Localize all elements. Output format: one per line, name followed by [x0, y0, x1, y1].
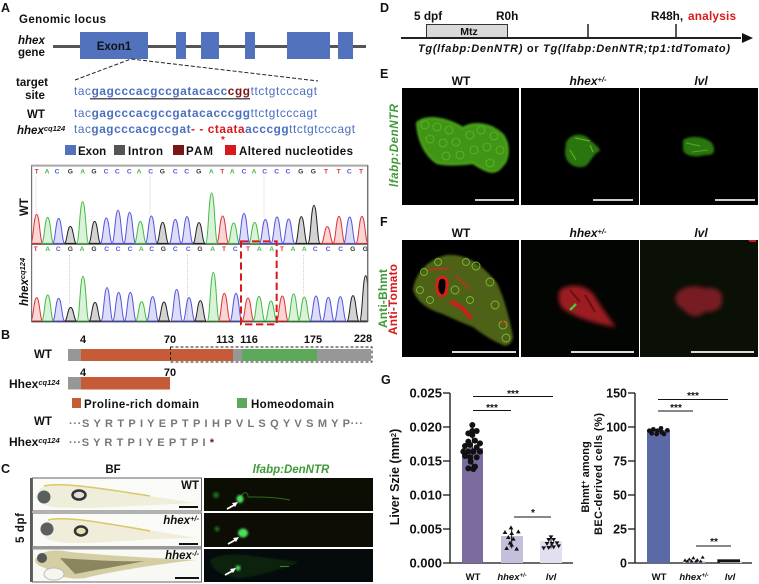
panel A: genomic locus	[1, 1, 372, 324]
data points	[460, 422, 561, 551]
x labels	[652, 572, 736, 583]
column headings	[452, 226, 708, 240]
sequence legend: Altered nucleotides	[239, 146, 353, 158]
image: WT liver	[402, 88, 519, 205]
side labels: Anti-Tomato	[386, 264, 400, 335]
gene label	[18, 35, 45, 59]
image: lvl liver	[640, 88, 758, 205]
time labels: R0h	[496, 9, 518, 23]
WT sequence row: WT	[27, 109, 45, 121]
y axis: 25	[613, 522, 627, 536]
y axis title: among	[580, 441, 592, 480]
y axis: 0.010	[409, 488, 442, 502]
residue numbers: 175	[304, 334, 322, 346]
domain legend	[72, 398, 334, 411]
significance bars: ***	[486, 403, 498, 414]
mutant protein bar: Hhex	[9, 377, 38, 391]
panel letter E: E	[380, 67, 388, 81]
fluorescence het	[204, 513, 373, 547]
chromatogram labels: WT	[19, 198, 31, 216]
WT sequence row: tacgagcccacgccgatacacccggttctgtcccagt	[74, 106, 318, 120]
mutant protein bar: cq124	[38, 378, 60, 387]
y axis: 0.000	[409, 556, 442, 570]
brightfield WT	[32, 478, 202, 511]
x labels: lvl	[725, 572, 736, 583]
chromatogram labels: hhex	[19, 279, 31, 306]
image: lvl staining	[640, 240, 758, 357]
y axis	[606, 386, 752, 570]
panel B: protein domains	[1, 328, 372, 449]
significance bars: *	[531, 508, 535, 519]
significance bars: **	[710, 537, 718, 548]
time labels: analysis	[688, 9, 736, 23]
target site sequence: tacgagcccacgccgatacacccggttctgtcccagt	[74, 84, 318, 98]
residue numbers: 70	[164, 334, 176, 346]
y axis: 0.025	[409, 386, 442, 400]
residue numbers: 228	[354, 333, 372, 345]
target site label: site	[25, 90, 45, 102]
row label: 5 dpf	[15, 513, 27, 543]
y axis: 75	[613, 454, 627, 468]
panel letter B: B	[1, 328, 10, 342]
image: het liver	[521, 88, 639, 205]
time labels: 5 dpf	[414, 9, 442, 23]
residue numbers: 70	[164, 367, 176, 379]
sequence legend: Exon	[78, 146, 106, 158]
image: WT staining	[402, 240, 519, 357]
amino acid sequences: Hhex	[9, 435, 38, 449]
time labels	[414, 9, 736, 23]
panel F: immunostaining	[376, 215, 758, 357]
chart: Bhmt positive cells	[580, 386, 752, 583]
y axis title: Liver Szie (mm	[388, 437, 402, 525]
y axis title	[580, 413, 605, 535]
column headings: +/-	[598, 75, 607, 84]
fluorescence homozygous	[204, 549, 373, 582]
y axis title: 2	[389, 433, 398, 437]
WT protein bar: WT	[34, 349, 52, 361]
y axis title: )	[388, 429, 402, 433]
y axis: 0.020	[409, 420, 442, 434]
panel D: timeline	[380, 1, 753, 55]
sequence legend: Intron	[128, 146, 163, 158]
significance bars: ***	[670, 403, 682, 414]
data points	[647, 426, 740, 563]
fluorescence WT	[204, 478, 373, 511]
amino acid sequences	[9, 416, 363, 449]
x labels	[466, 572, 557, 583]
Mtz box: Mtz	[460, 26, 478, 38]
x labels: hhex	[679, 572, 702, 583]
panel C: larvae images	[1, 462, 373, 582]
residue numbers: 4	[80, 367, 87, 379]
gene diagram	[53, 32, 366, 81]
domain legend: Homeodomain	[251, 399, 334, 411]
brightfield homozygous: -/-	[192, 549, 199, 558]
gene diagram: Exon1	[97, 41, 132, 53]
chromatograms: T A C G A G CCC A C G CC G A T C T AA T AA CCC GG	[34, 246, 368, 253]
column titles	[105, 464, 330, 476]
column headings	[452, 74, 708, 88]
y axis	[409, 386, 573, 570]
column headings: hhex	[570, 226, 598, 240]
y axis title: BEC-derived cells (%)	[593, 413, 605, 535]
x labels: WT	[652, 572, 667, 583]
brightfield het	[32, 513, 202, 547]
column headings: WT	[452, 74, 471, 88]
chromatograms: T A C G A G CCCA C G CC G A T A C A CCC GG TT C T	[35, 168, 363, 175]
residue numbers: 113	[216, 334, 234, 346]
x labels: WT	[466, 572, 481, 583]
brightfield WT: WT	[181, 480, 199, 492]
column headings: lvl	[694, 74, 708, 88]
residue numbers	[80, 333, 372, 379]
image: het staining	[521, 240, 639, 357]
mutant sequence row: cq124	[44, 124, 66, 133]
amino acid sequences: cq124	[38, 436, 60, 445]
column headings: +/-	[598, 227, 607, 236]
row label	[15, 478, 31, 582]
panel G: bar charts	[381, 373, 752, 583]
brightfield het: +/-	[190, 514, 199, 523]
timeline arrow	[401, 24, 753, 43]
column headings: WT	[452, 226, 471, 240]
residue numbers: 4	[80, 334, 87, 346]
bars	[647, 430, 742, 563]
amino acid sequences: ···S Y R T P I Y E P T P I H P V L S Q Y V S M Y P···	[69, 418, 363, 430]
heading: genomic locus: Genomic locus	[19, 14, 106, 26]
y axis: 0.015	[409, 454, 442, 468]
amino acid sequences: WT	[34, 416, 52, 428]
x labels: lvl	[546, 572, 557, 583]
Mtz box	[426, 24, 508, 38]
side labels	[376, 264, 400, 335]
chromatogram labels	[18, 198, 31, 306]
sequence legend	[65, 145, 353, 158]
significance bars: ***	[687, 391, 699, 402]
mutant sequence row: *	[221, 135, 225, 146]
mutant sequence row	[17, 122, 356, 146]
gene label: hhex	[18, 35, 45, 47]
target site label	[16, 77, 48, 102]
panel letter A: A	[1, 1, 10, 15]
domain legend: Proline-rich domain	[84, 399, 199, 411]
y axis title: Bhmt	[580, 485, 592, 513]
panel letter F: F	[380, 215, 388, 229]
y axis: 100	[606, 420, 627, 434]
y axis title: +	[581, 480, 588, 485]
brightfield het: hhex	[163, 515, 190, 527]
mutant protein bar	[9, 377, 170, 391]
column headings: hhex	[570, 74, 598, 88]
chart: liver size	[388, 386, 573, 583]
bars	[462, 448, 562, 563]
panel letter C: C	[1, 462, 10, 476]
significance bars: ***	[507, 389, 519, 400]
brightfield homozygous	[32, 546, 202, 582]
x labels: hhex	[497, 572, 520, 583]
y axis: 150	[606, 386, 627, 400]
time labels: R48h,	[651, 9, 683, 23]
WT protein bar	[34, 347, 372, 362]
sequence legend: PAM	[186, 146, 213, 158]
y axis: 0	[620, 556, 627, 570]
residue numbers: 116	[240, 334, 258, 346]
y axis: 50	[613, 488, 627, 502]
column headings: lvl	[694, 226, 708, 240]
side label: lfabp:DenNTR	[389, 103, 401, 187]
panel letter D: D	[380, 1, 389, 15]
x labels: +/-	[702, 573, 709, 579]
panel E: liver images	[380, 67, 758, 205]
genotype caption: Tg(lfabp:DenNTR) or Tg(lfabp:DenNTR;tp1:tdTomato)	[418, 43, 730, 55]
significance bars	[473, 389, 553, 519]
significance bars	[658, 391, 731, 548]
chromatograms	[31, 165, 372, 324]
y axis: 0.005	[409, 522, 442, 536]
x labels: +/-	[520, 573, 527, 579]
side labels: Anti-Bhmt	[376, 269, 390, 328]
gene label: gene	[18, 47, 45, 59]
target site label: target	[16, 77, 48, 89]
amino acid sequences: ···S Y R T P I Y E P T P I *	[69, 437, 215, 449]
panel letter G: G	[381, 373, 391, 387]
mutant sequence row: hhex	[17, 125, 44, 137]
column titles: BF	[105, 464, 121, 476]
chromatogram labels: cq124	[18, 257, 27, 279]
brightfield homozygous: hhex	[165, 550, 192, 562]
mutant sequence row: tacgagcccacgccgat- - ctaataacccggttctgtcccagt	[74, 122, 356, 136]
column titles: lfabp:DenNTR	[253, 464, 330, 476]
